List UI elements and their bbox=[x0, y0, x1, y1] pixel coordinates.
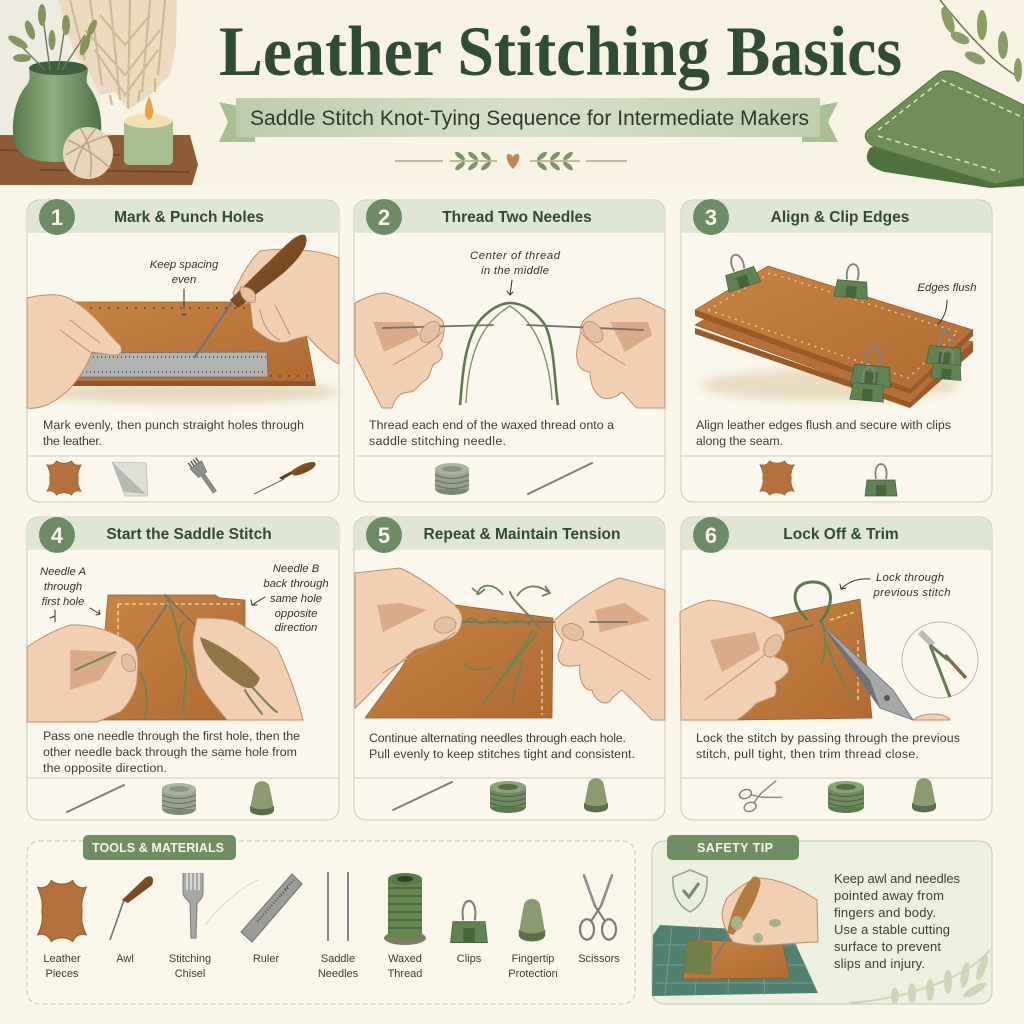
annotation: edges flush: Edges flush bbox=[918, 282, 976, 294]
text: safety advice: Keep awl and needles bbox=[834, 871, 960, 886]
description bbox=[43, 418, 304, 448]
inset: trimming detail bbox=[902, 622, 978, 698]
description: the opposite direction. bbox=[43, 761, 167, 775]
icon: shield bbox=[673, 870, 707, 912]
tool: saddle needles: Needles bbox=[318, 968, 359, 980]
annotation: keep spacing even: even bbox=[172, 274, 196, 286]
ornament: leaves and heart bbox=[395, 150, 627, 172]
heading: Mark & Punch Holes bbox=[114, 209, 264, 226]
tool: leather pieces bbox=[38, 880, 86, 980]
description: Continue alternating needles through each hole. bbox=[369, 731, 626, 745]
description: saddle stitching needle. bbox=[369, 434, 506, 448]
step number 5: 5 bbox=[378, 523, 390, 548]
description: other needle back through the same hole from bbox=[43, 745, 297, 759]
description bbox=[369, 731, 635, 761]
tool: stitching chisel: Stitching bbox=[169, 953, 211, 965]
annotation: center of thread: Center of thread bbox=[470, 250, 561, 262]
annotation: needle B: back through bbox=[263, 578, 329, 590]
description bbox=[696, 731, 960, 761]
annotation: edges flush bbox=[918, 282, 976, 324]
annotation: needle A: through bbox=[44, 581, 82, 593]
illustration: threading needles bbox=[355, 250, 665, 408]
tool: stitching chisel bbox=[169, 873, 258, 980]
tool icons row bbox=[47, 456, 316, 496]
panel: tools and materials bbox=[27, 835, 635, 1004]
step number 1 bbox=[39, 199, 75, 235]
panel: step 6 bbox=[680, 517, 992, 820]
step number 6 bbox=[693, 517, 729, 553]
illustration: hands marking leather bbox=[27, 235, 340, 408]
tool icons row bbox=[67, 781, 274, 815]
text: safety advice: fingers and body. bbox=[834, 905, 936, 920]
tool: saddle needles: Saddle bbox=[321, 953, 355, 965]
tab heading bbox=[83, 835, 236, 860]
annotation: keep spacing even: Keep spacing bbox=[150, 259, 219, 271]
step number 6: 6 bbox=[705, 523, 717, 548]
clips on the seam bbox=[719, 250, 964, 402]
annotation: lock through: Lock through bbox=[876, 572, 944, 584]
tool: clips bbox=[451, 901, 487, 965]
heading: Lock Off & Trim bbox=[783, 526, 899, 543]
title: Leather Stitching Basics bbox=[219, 13, 902, 91]
tool: scissors bbox=[578, 875, 620, 965]
tool: stitching chisel: Chisel bbox=[175, 968, 205, 980]
tool: saddle needles bbox=[318, 872, 359, 980]
panel: safety tip bbox=[652, 835, 992, 1004]
tool: leather pieces: Pieces bbox=[45, 968, 79, 980]
tool: clips: Clips bbox=[457, 953, 482, 965]
annotation: center of thread bbox=[470, 250, 561, 295]
text: safety advice: surface to prevent bbox=[834, 939, 941, 954]
step number 3 bbox=[693, 199, 729, 235]
text: safety advice: slips and injury. bbox=[834, 956, 925, 971]
text: safety advice: pointed away from bbox=[834, 888, 944, 903]
annotation: needle A: first hole bbox=[42, 596, 84, 608]
annotation: needle A: Needle A bbox=[40, 566, 86, 578]
annotation: needle A bbox=[40, 566, 100, 622]
description: Lock the stitch by passing through the previous bbox=[696, 731, 960, 745]
tool: scissors: Scissors bbox=[578, 953, 620, 965]
description: Thread each end of the waxed thread onto a bbox=[369, 418, 614, 432]
header banner bbox=[0, 0, 1024, 188]
description: Pass one needle through the first hole, then the bbox=[43, 729, 300, 743]
tab heading: SAFETY TIP bbox=[697, 841, 773, 855]
tool: waxed thread bbox=[384, 873, 426, 980]
annotation: needle B: opposite bbox=[275, 608, 317, 620]
annotation: center of thread: in the middle bbox=[481, 265, 549, 277]
illustration: green wallet and twig bbox=[865, 0, 1024, 188]
description: Align leather edges flush and secure with clips bbox=[696, 418, 951, 432]
illustration: alternating needles bbox=[355, 568, 665, 720]
panel: step 3 bbox=[681, 199, 992, 502]
description: the leather. bbox=[43, 434, 102, 448]
panel: step 1 bbox=[27, 199, 340, 502]
heading: Start the Saddle Stitch bbox=[106, 526, 272, 543]
annotation: needle B: same hole bbox=[270, 593, 322, 605]
tool icons row bbox=[738, 778, 936, 813]
panel: step 2 bbox=[354, 199, 665, 502]
tab heading: TOOLS & MATERIALS bbox=[92, 841, 224, 855]
step number 2 bbox=[366, 199, 402, 235]
description bbox=[43, 729, 300, 775]
tab heading bbox=[667, 835, 799, 860]
panel: step 4 bbox=[27, 517, 339, 820]
description: along the seam. bbox=[696, 434, 783, 448]
heading: Thread Two Needles bbox=[442, 209, 592, 226]
description: stitch, pull tight, then trim thread close. bbox=[696, 747, 919, 761]
panel: step 5 bbox=[354, 517, 665, 820]
illustration: macrame, vase, yarn and candle bbox=[0, 0, 198, 185]
description: Mark evenly, then punch straight holes through bbox=[43, 418, 304, 432]
tool: fingertip protection: Protection bbox=[508, 968, 558, 980]
text: safety advice: Use a stable cutting bbox=[834, 922, 950, 937]
step number 5 bbox=[366, 517, 402, 553]
heading: Repeat & Maintain Tension bbox=[424, 526, 620, 543]
subtitle ribbon bbox=[219, 98, 838, 142]
illustration: locking and trimming bbox=[680, 572, 978, 720]
decoration: leafy sprig bbox=[850, 950, 990, 1004]
tool icons row bbox=[393, 778, 608, 813]
step number 1: 1 bbox=[51, 205, 63, 230]
illustration: clipped leather bbox=[695, 250, 976, 408]
tool icons row bbox=[760, 461, 897, 496]
annotation: lock through bbox=[840, 572, 950, 599]
annotation: needle B: direction bbox=[275, 622, 317, 634]
heading: Align & Clip Edges bbox=[771, 209, 909, 226]
tool: waxed thread: Waxed bbox=[388, 953, 422, 965]
annotation: needle B: Needle B bbox=[273, 563, 320, 575]
tool: leather pieces: Leather bbox=[43, 953, 81, 965]
tool: awl: Awl bbox=[116, 953, 134, 965]
step number 3: 3 bbox=[705, 205, 717, 230]
step number 2: 2 bbox=[378, 205, 390, 230]
illustration: starting the stitch bbox=[27, 563, 329, 722]
tool: fingertip protection: Fingertip bbox=[512, 953, 554, 965]
step number 4: 4 bbox=[51, 523, 64, 548]
illustration: hand with awl on cutting mat bbox=[652, 877, 818, 996]
tool: awl bbox=[110, 876, 153, 965]
annotation: needle B bbox=[251, 563, 329, 634]
text: safety advice bbox=[834, 871, 960, 971]
description bbox=[369, 418, 614, 448]
subtitle ribbon: Saddle Stitch Knot-Tying Sequence for Intermediate Makers bbox=[250, 107, 809, 130]
description: Pull evenly to keep stitches tight and consistent. bbox=[369, 747, 635, 761]
step number 4 bbox=[39, 517, 75, 553]
tool: fingertip protection bbox=[508, 899, 558, 980]
tool icons row bbox=[435, 463, 592, 495]
annotation: lock through: previous stitch bbox=[872, 587, 950, 599]
tool: waxed thread: Thread bbox=[388, 968, 422, 980]
tool: ruler bbox=[241, 874, 302, 965]
description bbox=[696, 418, 951, 448]
tool: ruler: Ruler bbox=[253, 953, 279, 965]
annotation: keep spacing even bbox=[150, 259, 219, 315]
